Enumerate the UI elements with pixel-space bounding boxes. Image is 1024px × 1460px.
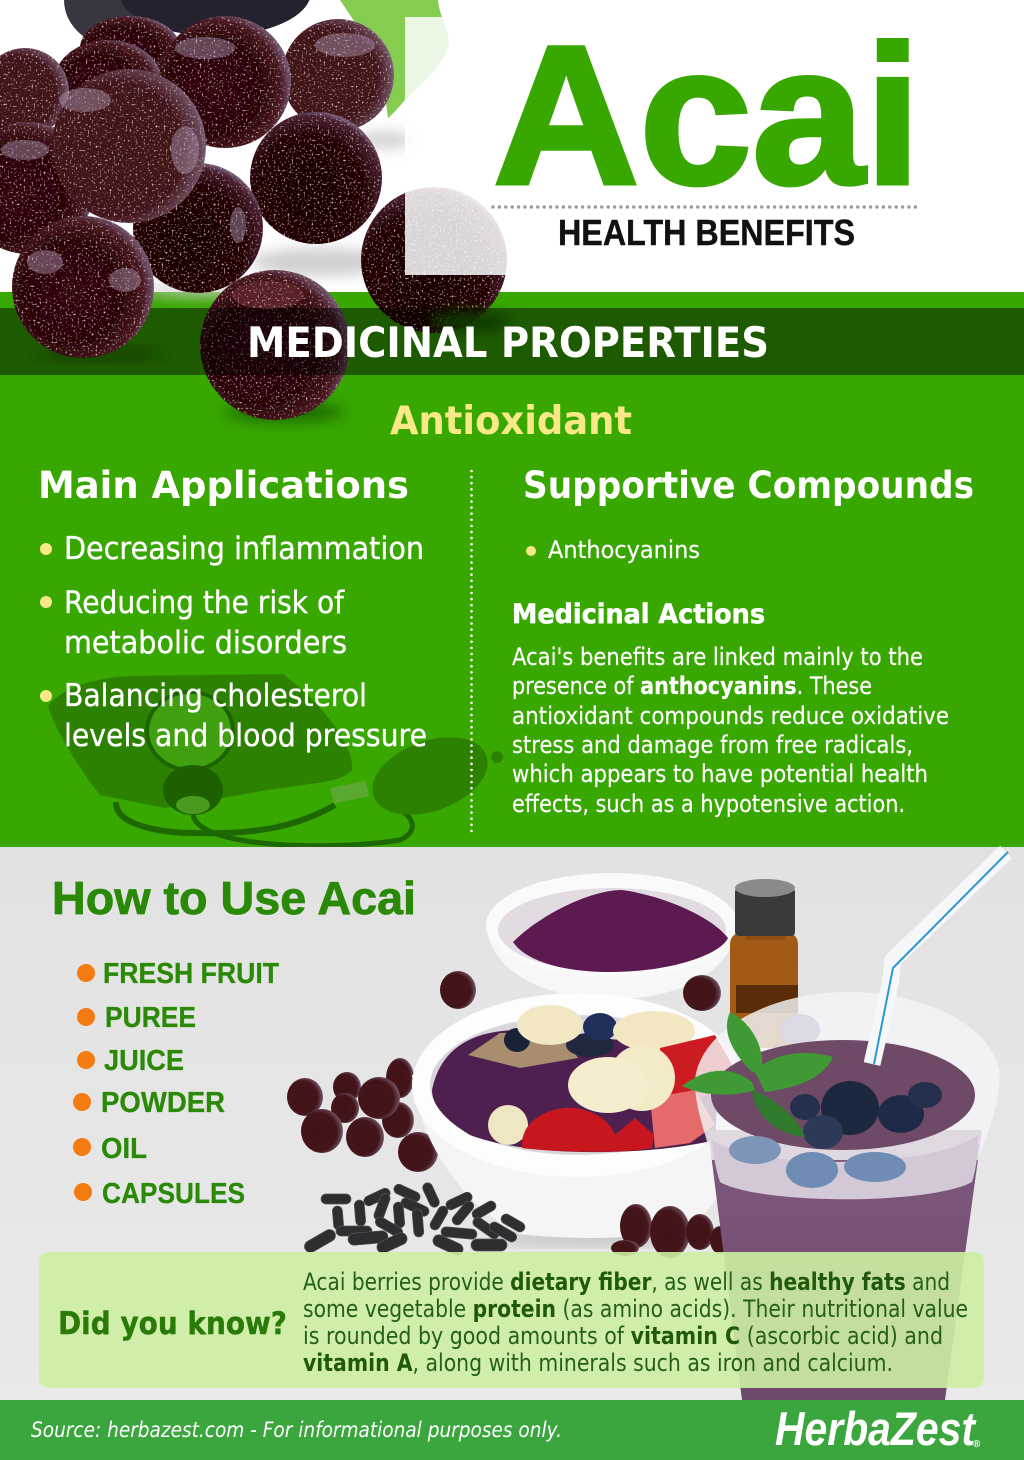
list: forms of use: FRESH FRUIT bbox=[103, 958, 279, 990]
list: supportive compounds: Anthocyanins bbox=[548, 536, 700, 564]
text block: medicinal actions: presence of anthocyanins. These bbox=[512, 672, 872, 700]
green properties panel background bbox=[0, 292, 1024, 847]
list: main applications bbox=[40, 531, 427, 754]
heading: main applications: Main Applications bbox=[38, 464, 409, 507]
illustration: smoothie cup bbox=[695, 992, 1000, 1400]
heading: supportive compounds: Supportive Compounds bbox=[523, 464, 974, 507]
berry shadows on green bbox=[225, 312, 510, 422]
list: main applications: Decreasing inflammation bbox=[64, 531, 424, 567]
front berry shadow bbox=[40, 345, 160, 363]
illustration: acai bowl with fruit bbox=[412, 993, 750, 1247]
callout text: Acai berries provide dietary fiber, as well as healthy fats and bbox=[303, 1268, 950, 1296]
icons: berries by cup bbox=[611, 1204, 730, 1258]
callout text bbox=[303, 1268, 968, 1377]
list: forms of use: CAPSULES bbox=[102, 1178, 245, 1210]
icons: loose berries bbox=[440, 971, 721, 1011]
illustration: berry cluster bbox=[287, 1058, 438, 1172]
text block: medicinal actions: effects, such as a hypotensive action. bbox=[512, 790, 905, 818]
text block: medicinal actions: stress and damage from free radicals, bbox=[512, 731, 913, 759]
list: main applications: levels and blood pressure bbox=[64, 718, 427, 754]
illustration: capsules bbox=[302, 1181, 527, 1257]
header background bbox=[0, 0, 1024, 292]
panel: how to use background bbox=[0, 847, 1024, 1400]
illustration: acai berry pile bbox=[0, 16, 507, 333]
list: forms of use: JUICE bbox=[104, 1045, 184, 1077]
footer bar bbox=[0, 1400, 1024, 1460]
berry shadows on table bbox=[140, 132, 415, 296]
subtitle: health benefits: HEALTH BENEFITS bbox=[558, 212, 855, 253]
icon: dark berries at top bbox=[64, 0, 311, 48]
heading: how to use acai: How to Use Acai bbox=[52, 872, 416, 924]
icon: front berry bbox=[12, 216, 154, 358]
callout: did you know box bbox=[39, 1252, 984, 1388]
icon: mint sprig bbox=[682, 1012, 833, 1137]
translucent white panel behind title bbox=[405, 17, 507, 275]
callout text: some vegetable protein (as amino acids). Their nutritional value bbox=[303, 1295, 968, 1323]
illustration: bowl of acai powder bbox=[486, 873, 738, 1000]
white title backdrop bbox=[507, 0, 1024, 292]
source note: Source: herbazest.com - For informational purposes only. bbox=[31, 1418, 562, 1442]
berry highlights bbox=[1, 33, 375, 292]
heading: medicinal properties: MEDICINAL PROPERTIES bbox=[247, 318, 769, 367]
list: forms of use bbox=[73, 958, 279, 1210]
title: Acai: Acai bbox=[493, 4, 921, 226]
text block: medicinal actions: which appears to have potential health bbox=[512, 760, 928, 788]
heading: medicinal actions: Medicinal Actions bbox=[512, 599, 765, 630]
lower berry over green bbox=[200, 270, 350, 420]
heading: antioxidant: Antioxidant bbox=[390, 399, 632, 444]
list: forms of use: PUREE bbox=[105, 1002, 196, 1034]
list: main applications: Reducing the risk of bbox=[64, 585, 345, 621]
logo: HerbaZest: HerbaZest bbox=[775, 1402, 977, 1455]
text block: medicinal actions: antioxidant compounds reduce oxidative bbox=[512, 702, 949, 730]
text block: medicinal actions: Acai's benefits are linked mainly to the bbox=[512, 643, 923, 671]
text block: medicinal actions bbox=[512, 643, 949, 818]
logo: HerbaZest: ® bbox=[973, 1439, 981, 1450]
list: forms of use: POWDER bbox=[101, 1087, 225, 1119]
list: main applications: Balancing cholesterol bbox=[64, 678, 367, 714]
illustration: blood pressure monitor bbox=[48, 674, 503, 846]
list: main applications: metabolic disorders bbox=[64, 625, 347, 661]
illustration: oil bottle bbox=[730, 879, 798, 1048]
medicinal properties dark band bbox=[0, 308, 1024, 375]
icon: leaf behind berries bbox=[340, 0, 449, 118]
list: forms of use: OIL bbox=[101, 1133, 147, 1165]
dotted divider under title bbox=[493, 205, 917, 209]
callout heading: did you know: Did you know? bbox=[58, 1306, 287, 1342]
callout text: vitamin A, along with minerals such as iron and calcium. bbox=[303, 1349, 893, 1377]
callout text: is rounded by good amounts of vitamin C (ascorbic acid) and bbox=[303, 1322, 943, 1350]
icon: straw bbox=[872, 852, 1008, 1064]
